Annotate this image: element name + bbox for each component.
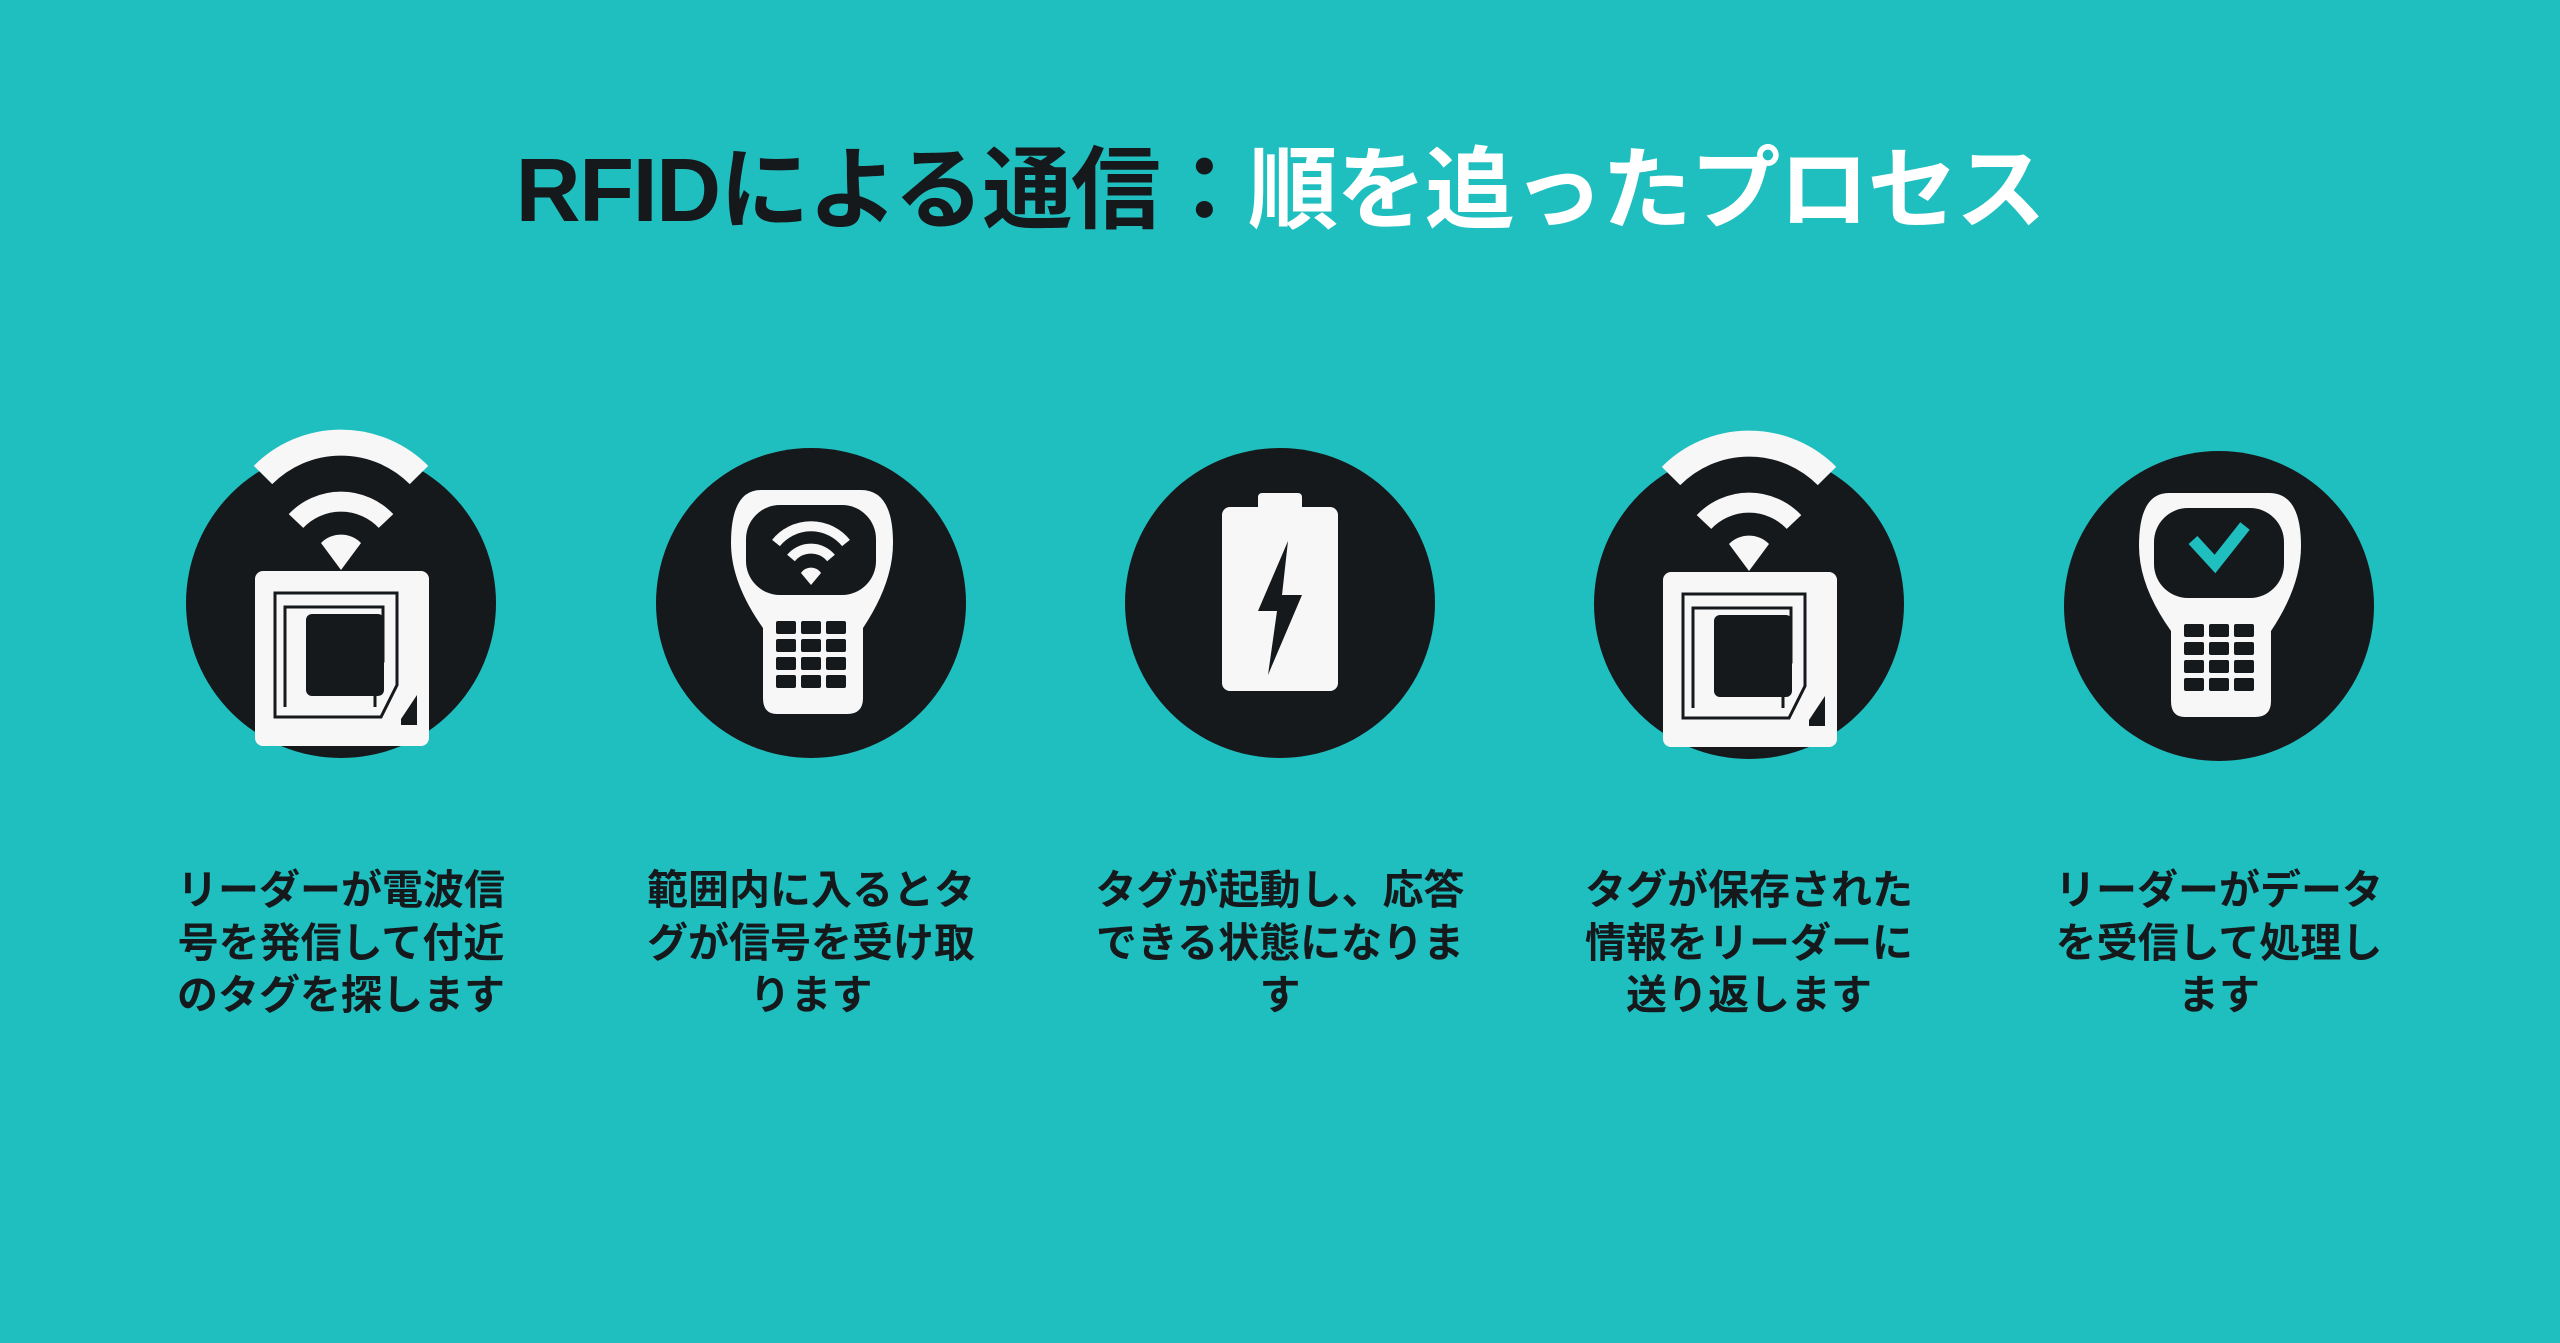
caption 5: リーダーがデータ [2055,867,2383,913]
caption 4 [1585,867,1913,1018]
caption 1: 号を発信して付近 [178,920,504,966]
caption 4: タグが保存された [1585,867,1913,913]
title: RFIDによる通信：順を追ったプロセス [516,141,2044,241]
caption 5: ます [2178,972,2260,1018]
caption 2: グが信号を受け取 [647,920,975,966]
caption 3: タグが起動し、応答 [1096,867,1464,913]
caption 2: 範囲内に入るとタ [647,867,975,913]
caption 5: を受信して処理し [2056,920,2382,966]
caption 3: できる状態になりま [1096,920,1464,966]
caption 2 [647,867,975,1018]
caption 5 [2055,867,2383,1018]
caption 3: す [1260,972,1300,1018]
icon: tag sending data back [1594,430,1904,759]
caption 2: ります [750,972,872,1018]
caption 1 [177,867,505,1018]
icon: reader with wifi [656,448,966,758]
caption 4: 情報をリーダーに [1585,920,1913,966]
caption 1: リーダーが電波信 [177,867,505,913]
caption 4: 送り返します [1626,972,1872,1018]
icon: battery [1125,448,1435,758]
caption 3 [1096,867,1464,1018]
caption 1: のタグを探します [177,972,505,1018]
icon: reader with check [2064,451,2374,761]
icon: tag sending signal [186,430,496,758]
